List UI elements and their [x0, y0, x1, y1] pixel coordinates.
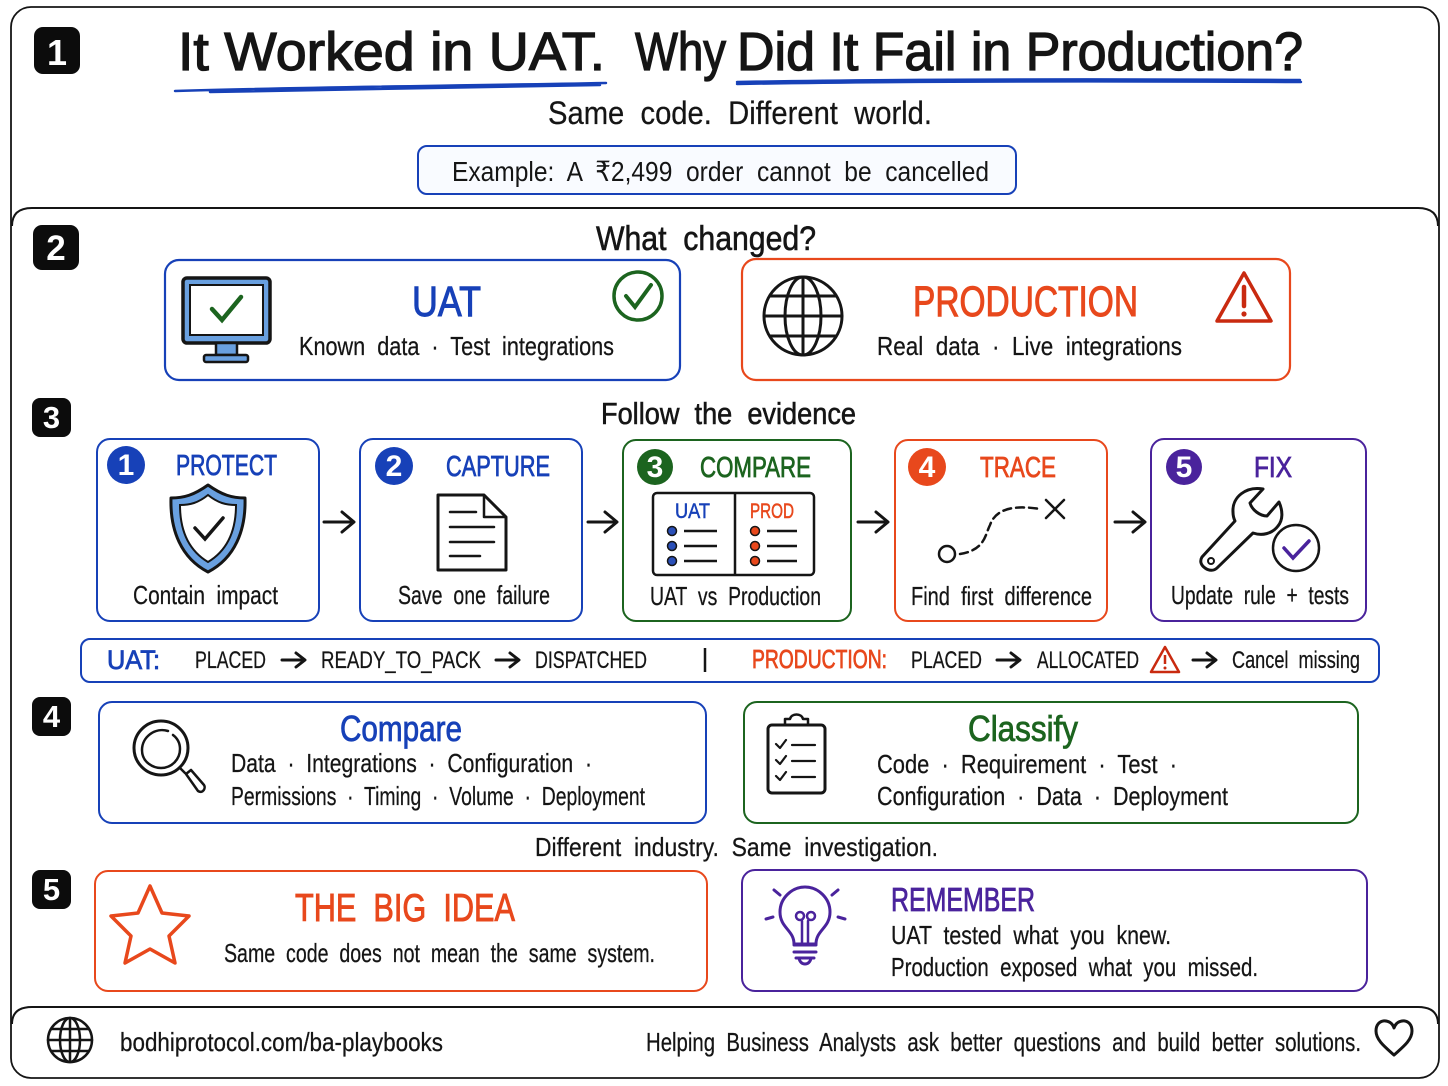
- step 5: fix: [1151, 439, 1366, 621]
- step 2: capture: CAPTURE: [446, 451, 550, 483]
- panel: compare: Compare: [340, 708, 462, 749]
- badge 3: [32, 398, 71, 437]
- panel: remember: Production exposed what you missed.: [891, 952, 1258, 982]
- state flow strip: PLACED: [911, 647, 982, 674]
- badge 5: [32, 870, 71, 909]
- state flow strip: READY_TO_PACK: [321, 647, 481, 674]
- icon: warning: [1217, 273, 1271, 321]
- compare table: PROD: [750, 500, 794, 523]
- panel: the big idea: THE BIG IDEA: [295, 887, 515, 930]
- panel: remember: [742, 870, 1367, 991]
- section 1: header: [34, 22, 1303, 194]
- title: [178, 22, 1303, 82]
- footer: [12, 1007, 1438, 1062]
- heading: Follow the evidence: [601, 396, 856, 431]
- step 3: compare: COMPARE: [700, 452, 811, 484]
- state flow strip: PRODUCTION:: [752, 644, 887, 674]
- subtitle: Same code. Different world.: [548, 95, 932, 131]
- example callout: [418, 146, 1016, 194]
- icon: magnifier: [134, 721, 205, 792]
- arrow 2: [588, 512, 617, 532]
- step 2: capture: 2: [386, 450, 402, 483]
- icon: globe: [764, 277, 842, 355]
- panel: compare: Data · Integrations · Configuration ·: [231, 748, 592, 778]
- icon: check circle: [614, 272, 662, 320]
- step 5: fix: 5: [1176, 451, 1192, 484]
- step 1: protect: Contain impact: [133, 580, 279, 610]
- title: Why: [635, 22, 726, 82]
- icon: heart: [1376, 1021, 1412, 1055]
- main panel divider: [12, 208, 1438, 226]
- section 4: compare and classify: [32, 697, 1358, 862]
- icon: warning small: [1151, 647, 1179, 672]
- icon: shield: [171, 485, 245, 572]
- section 3: follow the evidence: [32, 396, 1379, 682]
- title underline: [175, 79, 1301, 92]
- badge 4: [32, 697, 71, 736]
- step 4: trace: 4: [919, 451, 936, 484]
- step 4: trace: Find first difference: [911, 581, 1092, 611]
- state flow strip: UAT:: [107, 645, 160, 675]
- UAT label: UAT: [412, 278, 481, 326]
- section 2: what changed: [33, 220, 1290, 380]
- state flow strip: ALLOCATED: [1037, 647, 1139, 674]
- tagline: Different industry. Same investigation.: [535, 832, 938, 862]
- icon: document: [438, 495, 506, 570]
- arrow 1: [324, 512, 354, 532]
- icon: light bulb: [766, 887, 845, 964]
- arrow 3: [858, 512, 888, 532]
- step 4: trace: [895, 440, 1107, 621]
- badge 3: 3: [43, 400, 60, 435]
- panel: production: [742, 259, 1290, 380]
- panel: classify: Code · Requirement · Test ·: [877, 749, 1177, 779]
- step 3: compare: [623, 440, 851, 621]
- example callout: Example: A ₹2,499 order cannot be cancelled: [452, 156, 989, 187]
- title: Did It Fail in Production?: [737, 22, 1303, 82]
- panel: remember: REMEMBER: [891, 881, 1035, 918]
- heading: What changed?: [596, 220, 816, 258]
- badge 4: 4: [43, 699, 61, 734]
- icon: star: [111, 886, 189, 963]
- badge 5: 5: [43, 872, 60, 907]
- section 5: takeaways: [32, 870, 1367, 991]
- step 5: fix: FIX: [1254, 452, 1292, 484]
- icon: globe small: [48, 1018, 92, 1062]
- panel: compare: Permissions · Timing · Volume · Deployment: [231, 781, 646, 811]
- footer link: bodhiprotocol.com/ba-playbooks: [120, 1027, 443, 1057]
- step 1: protect: [97, 439, 319, 621]
- icon: dashed trace path: [939, 500, 1064, 562]
- panel: UAT: [165, 260, 680, 380]
- state flow strip: Cancel missing: [1232, 647, 1360, 674]
- production label: PRODUCTION: [913, 278, 1138, 326]
- state flow strip: [81, 639, 1379, 682]
- step 5: fix: Update rule + tests: [1171, 580, 1349, 610]
- step 2: capture: [360, 439, 582, 621]
- step 2: capture: Save one failure: [398, 580, 550, 610]
- panel: classify: Configuration · Data · Deployment: [877, 781, 1229, 811]
- icon: wrench: [1201, 489, 1282, 570]
- panel: classify: Classify: [968, 708, 1078, 749]
- production detail: Real data · Live integrations: [877, 331, 1182, 361]
- panel: classify: [744, 702, 1358, 823]
- icon: check badge: [1273, 525, 1319, 571]
- UAT detail: Known data · Test integrations: [299, 331, 614, 361]
- badge 1: 1: [47, 32, 67, 73]
- step 4: trace: TRACE: [980, 452, 1056, 484]
- badge 2: [33, 225, 79, 270]
- panel: the big idea: [95, 871, 707, 991]
- panel: the big idea: Same code does not mean the same system.: [224, 938, 655, 968]
- compare table: [653, 493, 814, 575]
- step 3: compare: UAT vs Production: [650, 581, 821, 611]
- badge 2: 2: [46, 229, 66, 268]
- icon: monitor: [183, 278, 270, 362]
- title: It Worked in UAT.: [178, 22, 605, 82]
- step 1: protect: 1: [118, 449, 134, 482]
- state flow strip: DISPATCHED: [535, 647, 647, 674]
- icon: clipboard: [768, 714, 825, 793]
- step 1: protect: PROTECT: [176, 450, 277, 482]
- badge 1: [34, 27, 80, 74]
- panel: remember: UAT tested what you knew.: [891, 920, 1171, 950]
- compare table: UAT: [675, 500, 710, 523]
- state flow strip: PLACED: [195, 647, 266, 674]
- panel: compare: [99, 702, 706, 823]
- step 3: compare: 3: [647, 451, 663, 484]
- arrow 4: [1115, 512, 1145, 532]
